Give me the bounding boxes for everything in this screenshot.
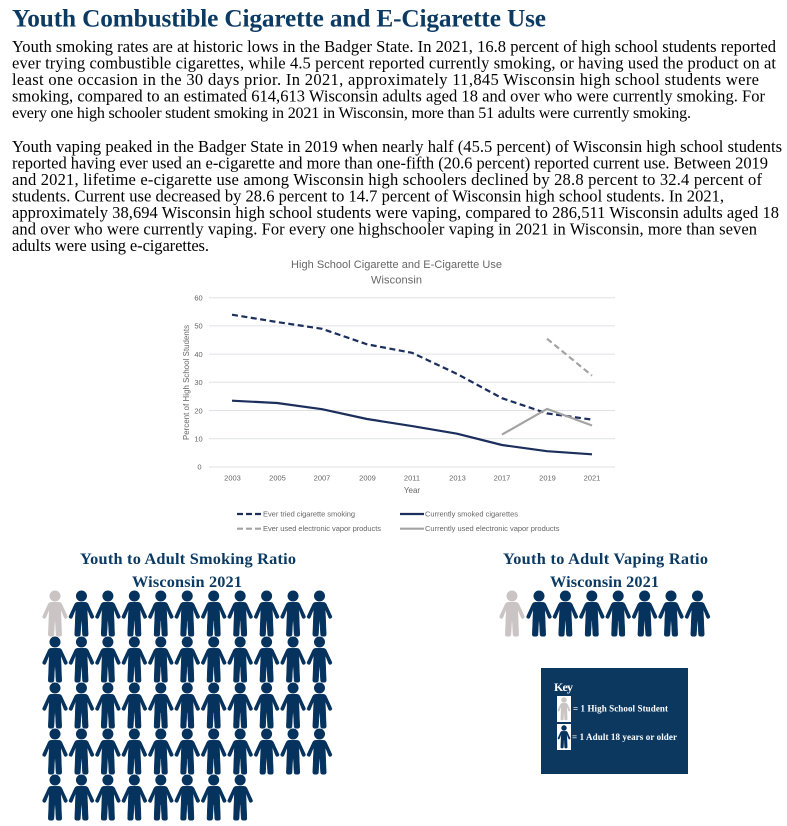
text block: youth smoking: Youth smoking rates are at historic lows in the Badger State. In 2021, 16.8 percent of high school students reported <box>12 37 777 56</box>
legend: Ever tried cigarette smoking <box>263 510 355 518</box>
x axis labels <box>224 474 600 482</box>
chart title: Wisconsin <box>371 274 422 286</box>
heading: youth to adult smoking ratio: Wisconsin 2021 <box>132 572 242 591</box>
x axis labels: 2021 <box>584 474 600 482</box>
legend: Ever used electronic vapor products <box>263 524 381 533</box>
series: ever used electronic vapor products <box>547 339 592 376</box>
series: currently smoked cigarettes <box>232 401 592 454</box>
chart title <box>291 259 502 286</box>
y axis labels: 30 <box>194 378 203 387</box>
y axis labels: 20 <box>194 406 203 415</box>
y axis title: Percent of High School Students <box>182 325 191 440</box>
text block: youth smoking: smoking, compared to an estimated 614,613 Wisconsin adults aged 18 and over who were currently smoking. For <box>12 86 766 106</box>
key label: high school student: = 1 High School Student <box>573 704 668 714</box>
x axis labels: 2019 <box>539 474 556 482</box>
heading: youth to adult vaping ratio <box>503 549 708 591</box>
icon: high school student <box>557 696 571 722</box>
panel: key <box>541 668 688 774</box>
text block: youth vaping: reported having ever used an e-cigarette and more than one-fifth (20.6 percent) reported current use. Between 2019 <box>12 154 768 172</box>
pictogram: vaping ratio, 1 student to 7 adults <box>500 591 710 636</box>
x axis labels: 2011 <box>404 474 420 482</box>
line chart: high school cigarette and e-cigarette use <box>182 259 615 533</box>
text block: youth smoking: least one occasion in the 30 days prior. In 2021, approximately 11,845 Wisconsin high school students were <box>12 70 759 89</box>
legend: Currently used electronic vapor products <box>425 524 560 533</box>
y axis labels: 40 <box>194 350 203 359</box>
x axis labels: 2017 <box>494 474 510 482</box>
title: Youth Combustible Cigarette and E-Cigarette Use <box>12 4 546 32</box>
key label: adult: = 1 Adult 18 years or older <box>572 732 677 742</box>
x axis labels: 2003 <box>224 474 241 482</box>
x axis title: Year <box>404 486 420 495</box>
chart title: High School Cigarette and E-Cigarette Use <box>291 259 502 271</box>
text block: youth vaping: and over who were currently vaping. For every one highschooler vaping in 2021 in Wisconsin, more than seven <box>12 220 757 238</box>
x axis labels: 2009 <box>359 474 376 482</box>
legend <box>237 510 560 533</box>
y axis labels: 0 <box>197 462 202 472</box>
text block: youth smoking: ever trying combustible cigarettes, while 4.5 percent reported currently smoking, or having used the product on at <box>12 54 776 72</box>
series: currently used electronic vapor products <box>502 409 592 435</box>
key heading: Key <box>554 680 573 694</box>
x axis labels: 2013 <box>449 474 466 482</box>
text block: youth vaping: and 2021, lifetime e-cigarette use among Wisconsin high schoolers declined by 28.8 percent to 32.4 percent of <box>12 170 762 189</box>
text block: youth vaping: Youth vaping peaked in the Badger State in 2019 when nearly half (45.5 percent) of Wisconsin high school students <box>12 137 782 156</box>
series: ever tried cigarette smoking <box>232 315 592 420</box>
y axis labels: 60 <box>194 294 203 302</box>
x axis labels: 2005 <box>269 474 286 482</box>
text block: youth vaping: approximately 38,694 Wisconsin high school students were vaping, compared to 286,511 Wisconsin adults aged 18 <box>12 203 779 222</box>
y axis labels <box>194 294 203 472</box>
text block: youth smoking <box>12 37 777 122</box>
y axis labels: 50 <box>194 322 203 331</box>
pictogram: smoking ratio, 1 student to 51 adults <box>43 591 332 820</box>
heading: youth to adult smoking ratio <box>80 549 296 591</box>
heading: youth to adult vaping ratio: Youth to Adult Vaping Ratio <box>503 549 708 568</box>
text block: youth vaping <box>12 137 782 255</box>
heading: youth to adult vaping ratio: Wisconsin 2021 <box>550 572 659 591</box>
heading: youth to adult smoking ratio: Youth to Adult Smoking Ratio <box>80 549 296 568</box>
y axis labels: 10 <box>194 434 203 444</box>
text block: youth vaping: adults were using e-cigarettes. <box>12 236 209 255</box>
x axis labels: 2007 <box>314 474 330 482</box>
legend: Currently smoked cigarettes <box>425 510 518 518</box>
icon: adult <box>557 724 571 750</box>
text block: youth smoking: every one high schooler student smoking in 2021 in Wisconsin, more than 51 adults were currently smoking. <box>12 105 691 122</box>
text block: youth vaping: students. Current use decreased by 28.6 percent to 14.7 percent of Wisconsin high school students. In 2021, <box>12 186 724 206</box>
